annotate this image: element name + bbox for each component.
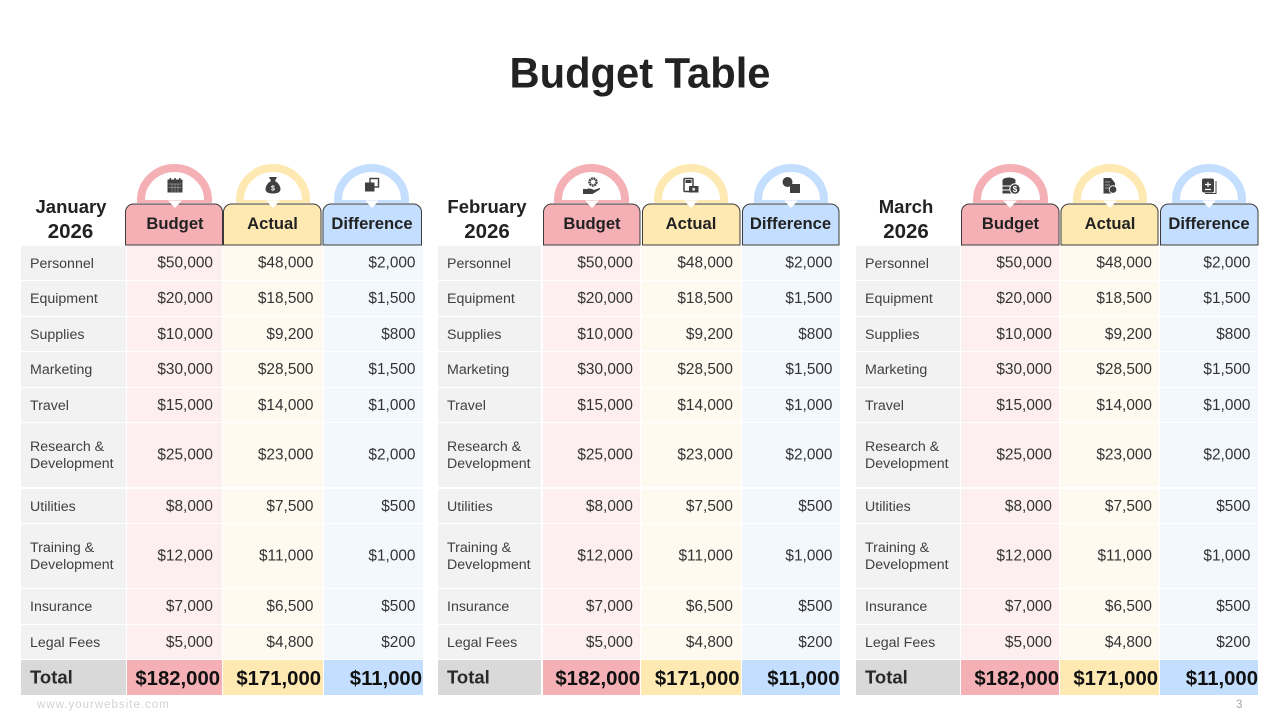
row: Supplies: Supplies xyxy=(447,327,501,343)
row: Research & Development: $25,000 xyxy=(157,446,213,464)
row: Supplies xyxy=(856,317,1258,351)
row: Marketing xyxy=(438,352,840,387)
heading: February 2026 xyxy=(447,196,527,243)
row: Research & Development: $23,000 xyxy=(677,446,733,464)
row: Marketing: $1,500 xyxy=(785,361,832,378)
row: Training & Development: $12,000 xyxy=(577,548,633,564)
icon: overlapping squares xyxy=(365,178,378,192)
row: Training & Development: $12,000 xyxy=(996,548,1052,564)
row: Legal Fees: $4,800 xyxy=(686,634,733,651)
row: Insurance: $7,000 xyxy=(586,598,633,615)
row: Supplies: Supplies xyxy=(865,327,919,343)
row: Supplies: $800 xyxy=(1216,326,1250,343)
row: Marketing: $30,000 xyxy=(577,361,633,378)
row: Training & Development xyxy=(856,524,1258,588)
row: Insurance: $6,500 xyxy=(1105,598,1152,615)
row: Marketing: Marketing xyxy=(865,362,927,378)
row: Utilities: $7,500 xyxy=(1105,498,1152,515)
row: Training & Development xyxy=(21,524,423,588)
row: Marketing: $1,500 xyxy=(1203,361,1250,378)
row: Travel: Travel xyxy=(865,398,904,414)
row: Total: Total xyxy=(30,666,73,688)
row: Personnel: $50,000 xyxy=(577,254,633,272)
row: Research & Development: $25,000 xyxy=(996,446,1052,464)
title: Budget Table xyxy=(510,50,770,98)
row: Travel: $1,000 xyxy=(1203,397,1250,414)
row: Total xyxy=(856,660,1258,695)
row: Legal Fees xyxy=(856,625,1258,659)
row: Utilities: Utilities xyxy=(865,499,911,515)
row: Supplies: $800 xyxy=(798,326,832,343)
row: Legal Fees: $200 xyxy=(1216,634,1250,651)
row: Total: $171,000 xyxy=(655,668,740,690)
row: Training & Development: Development xyxy=(30,557,114,573)
column header: Difference xyxy=(323,168,422,245)
row: Supplies: $9,200 xyxy=(686,326,733,343)
row: Insurance xyxy=(856,589,1258,624)
column header: Actual xyxy=(1061,168,1158,245)
row: Utilities xyxy=(438,489,840,523)
row: Utilities: $8,000 xyxy=(166,498,213,515)
row: Personnel xyxy=(856,246,1258,280)
row: Insurance: $7,000 xyxy=(1005,598,1052,615)
row: Total: Total xyxy=(447,666,490,688)
row: Supplies xyxy=(438,317,840,351)
row: Marketing: Marketing xyxy=(447,362,509,378)
row: Equipment: $20,000 xyxy=(157,290,213,307)
row: Legal Fees: $4,800 xyxy=(1105,634,1152,651)
row: Equipment xyxy=(438,281,840,316)
row: Equipment: $20,000 xyxy=(996,290,1052,307)
row: Utilities: $500 xyxy=(381,498,416,515)
heading: January 2026 xyxy=(36,196,107,243)
column header: Actual: Actual xyxy=(666,214,716,233)
row: Equipment: Equipment xyxy=(30,291,98,307)
row: Research & Development: $2,000 xyxy=(1203,446,1250,464)
row: Training & Development: Training & xyxy=(447,540,512,556)
row: Training & Development: Training & xyxy=(865,540,930,556)
icon: hand with gear xyxy=(583,178,600,194)
icon: coin database: $ xyxy=(1013,185,1018,194)
row: Equipment xyxy=(856,281,1258,316)
row: Total: $11,000 xyxy=(1186,668,1258,690)
icon: money bag xyxy=(266,177,280,194)
row: Travel: $15,000 xyxy=(577,397,633,414)
row: Travel: Travel xyxy=(447,398,486,414)
row: Equipment: Equipment xyxy=(447,291,515,307)
icon: coin database xyxy=(1002,178,1020,194)
row: Legal Fees: $5,000 xyxy=(166,634,213,651)
row: Total xyxy=(21,660,423,695)
column header: Budget: Budget xyxy=(563,214,621,233)
row: Equipment: $1,500 xyxy=(368,290,416,307)
row: Training & Development: $1,000 xyxy=(368,548,416,564)
row: Total: $182,000 xyxy=(974,668,1059,690)
row: Travel: Travel xyxy=(30,398,69,414)
row: Marketing: $28,500 xyxy=(677,361,733,378)
row: Travel: $15,000 xyxy=(996,397,1052,414)
row: Total: $182,000 xyxy=(135,668,220,690)
row: Equipment: $18,500 xyxy=(258,290,314,307)
row: Insurance: $500 xyxy=(798,598,832,615)
row: Training & Development: $1,000 xyxy=(785,548,832,564)
row: Travel: $14,000 xyxy=(258,397,314,414)
row: Supplies: $10,000 xyxy=(996,326,1052,343)
row: Marketing: $30,000 xyxy=(157,361,213,378)
row: Research & Development: $2,000 xyxy=(368,446,416,464)
icon: calculator and banknote xyxy=(684,178,698,192)
row: Total: $171,000 xyxy=(236,668,321,690)
row: Utilities: Utilities xyxy=(447,499,493,515)
heading: January 2026: January xyxy=(36,196,107,217)
row: Research & Development xyxy=(856,423,1258,487)
heading: February 2026: 2026 xyxy=(464,220,510,243)
column header: Budget: Budget xyxy=(982,214,1040,233)
row: Utilities: $7,500 xyxy=(266,498,314,515)
row: Travel xyxy=(438,388,840,422)
row: Legal Fees: Legal Fees xyxy=(865,635,935,651)
column header: Actual xyxy=(224,168,321,245)
column header: Difference xyxy=(1160,168,1258,245)
row: Equipment: $18,500 xyxy=(677,290,733,307)
row: Supplies: $9,200 xyxy=(266,326,314,343)
row: Research & Development: Development xyxy=(865,456,949,472)
row: Utilities xyxy=(856,489,1258,523)
row: Training & Development: $12,000 xyxy=(157,548,213,564)
panel: February 2026 xyxy=(438,168,840,695)
row: Legal Fees xyxy=(21,625,423,659)
row: Equipment: Equipment xyxy=(865,291,933,307)
row: Legal Fees: $200 xyxy=(381,634,416,651)
panel: January 2026 xyxy=(21,168,423,695)
column header: Difference: Difference xyxy=(750,214,831,233)
row: Insurance xyxy=(21,589,423,624)
row: Training & Development: $1,000 xyxy=(1203,548,1250,564)
row: Travel: $15,000 xyxy=(157,397,213,414)
row: Marketing: $1,500 xyxy=(368,361,416,378)
row: Total: $11,000 xyxy=(767,668,840,690)
row: Legal Fees: $4,800 xyxy=(266,634,314,651)
column header: Difference: Difference xyxy=(1168,214,1250,233)
column header: Actual: Actual xyxy=(247,214,298,233)
row: Supplies: Supplies xyxy=(30,327,84,343)
row: Marketing: $30,000 xyxy=(996,361,1052,378)
row: Supplies: $10,000 xyxy=(157,326,213,343)
row: Personnel: $2,000 xyxy=(1203,254,1250,272)
row: Total: $171,000 xyxy=(1073,668,1158,690)
row: Insurance: $500 xyxy=(1216,598,1250,615)
row: Utilities: $7,500 xyxy=(686,498,733,515)
row: Research & Development: $25,000 xyxy=(577,446,633,464)
row: Legal Fees: Legal Fees xyxy=(30,635,100,651)
row: Travel xyxy=(21,388,423,422)
row: Legal Fees xyxy=(438,625,840,659)
row: Insurance: $7,000 xyxy=(166,598,213,615)
footer website: www.yourwebsite.com xyxy=(36,699,170,711)
row: Training & Development: $11,000 xyxy=(678,548,733,564)
heading: March 2026: 2026 xyxy=(883,220,929,243)
column header: Actual xyxy=(642,168,740,245)
row: Personnel: $2,000 xyxy=(368,254,416,272)
icon: calendar xyxy=(168,178,182,192)
row: Total xyxy=(438,660,840,695)
panel: March 2026 xyxy=(856,168,1258,695)
row: Personnel: $2,000 xyxy=(785,254,832,272)
icon: document with plus-minus xyxy=(1202,178,1216,194)
row: Training & Development: Training & xyxy=(30,540,95,556)
column header: Difference xyxy=(742,168,839,245)
row: Legal Fees: Legal Fees xyxy=(447,635,517,651)
row: Travel: $14,000 xyxy=(677,397,733,414)
row: Training & Development: Development xyxy=(447,557,531,573)
row: Research & Development: Development xyxy=(30,456,114,472)
row: Equipment: $20,000 xyxy=(577,290,633,307)
row: Utilities: Utilities xyxy=(30,499,76,515)
row: Training & Development: $11,000 xyxy=(259,548,314,564)
heading: February 2026: February xyxy=(447,196,527,217)
row: Personnel: $48,000 xyxy=(258,254,314,272)
row: Marketing: Marketing xyxy=(30,362,92,378)
row: Utilities: $8,000 xyxy=(586,498,633,515)
row: Research & Development: Research & xyxy=(865,439,940,455)
row: Supplies xyxy=(21,317,423,351)
row: Utilities xyxy=(21,489,423,523)
row: Supplies: $800 xyxy=(381,326,416,343)
icon: document with coins xyxy=(1104,178,1117,194)
icon: money bag: $ xyxy=(271,186,275,192)
row: Personnel: $48,000 xyxy=(1096,254,1152,272)
row: Marketing: $28,500 xyxy=(258,361,314,378)
row: Research & Development: $2,000 xyxy=(785,446,832,464)
row: Personnel xyxy=(21,246,423,280)
row: Research & Development: $23,000 xyxy=(258,446,314,464)
row: Insurance: $6,500 xyxy=(686,598,733,615)
row: Research & Development xyxy=(21,423,423,487)
row: Total: $182,000 xyxy=(555,668,640,690)
row: Research & Development xyxy=(438,423,840,487)
heading: March 2026: March xyxy=(879,196,933,217)
row: Equipment xyxy=(21,281,423,316)
row: Marketing: $28,500 xyxy=(1096,361,1152,378)
row: Insurance xyxy=(438,589,840,624)
row: Legal Fees: $5,000 xyxy=(1005,634,1052,651)
row: Supplies: $9,200 xyxy=(1105,326,1152,343)
row: Travel: $1,000 xyxy=(785,397,832,414)
row: Personnel: Personnel xyxy=(30,256,94,272)
row: Insurance: Insurance xyxy=(30,599,92,615)
icon: circle and square xyxy=(782,177,800,193)
row: Personnel: $50,000 xyxy=(996,254,1052,272)
row: Personnel: Personnel xyxy=(447,256,511,272)
row: Total: $11,000 xyxy=(350,668,422,690)
row: Legal Fees: $200 xyxy=(798,634,832,651)
row: Research & Development: Research & xyxy=(447,439,522,455)
row: Legal Fees: $5,000 xyxy=(586,634,633,651)
page number: 3 xyxy=(1236,699,1242,711)
row: Marketing xyxy=(21,352,423,387)
heading: March 2026 xyxy=(879,196,933,243)
heading: January 2026: 2026 xyxy=(48,220,93,243)
row: Research & Development: $23,000 xyxy=(1096,446,1152,464)
row: Utilities: $500 xyxy=(1216,498,1250,515)
row: Research & Development: Development xyxy=(447,456,531,472)
column header: Actual: Actual xyxy=(1085,214,1135,233)
row: Research & Development: Research & xyxy=(30,439,105,455)
row: Insurance: $500 xyxy=(381,598,416,615)
row: Equipment: $1,500 xyxy=(1203,290,1250,307)
row: Insurance: Insurance xyxy=(865,599,927,615)
column header: Budget: Budget xyxy=(146,214,204,233)
row: Training & Development: Development xyxy=(865,557,949,573)
row: Total: Total xyxy=(865,666,908,688)
row: Personnel: $48,000 xyxy=(677,254,733,272)
column header: Budget xyxy=(544,168,640,245)
row: Insurance: Insurance xyxy=(447,599,509,615)
row: Personnel xyxy=(438,246,840,280)
row: Insurance: $6,500 xyxy=(266,598,314,615)
row: Supplies: $10,000 xyxy=(577,326,633,343)
row: Utilities: $8,000 xyxy=(1005,498,1052,515)
row: Personnel: Personnel xyxy=(865,256,929,272)
row: Personnel: $50,000 xyxy=(157,254,213,272)
row: Equipment: $18,500 xyxy=(1096,290,1152,307)
row: Travel xyxy=(856,388,1258,422)
column header: Budget xyxy=(962,168,1059,245)
row: Utilities: $500 xyxy=(798,498,832,515)
row: Training & Development xyxy=(438,524,840,588)
row: Equipment: $1,500 xyxy=(785,290,832,307)
row: Travel: $1,000 xyxy=(368,397,416,414)
row: Training & Development: $11,000 xyxy=(1098,548,1152,564)
row: Travel: $14,000 xyxy=(1096,397,1152,414)
row: Marketing xyxy=(856,352,1258,387)
column header: Budget xyxy=(126,168,222,245)
column header: Difference: Difference xyxy=(331,214,413,233)
